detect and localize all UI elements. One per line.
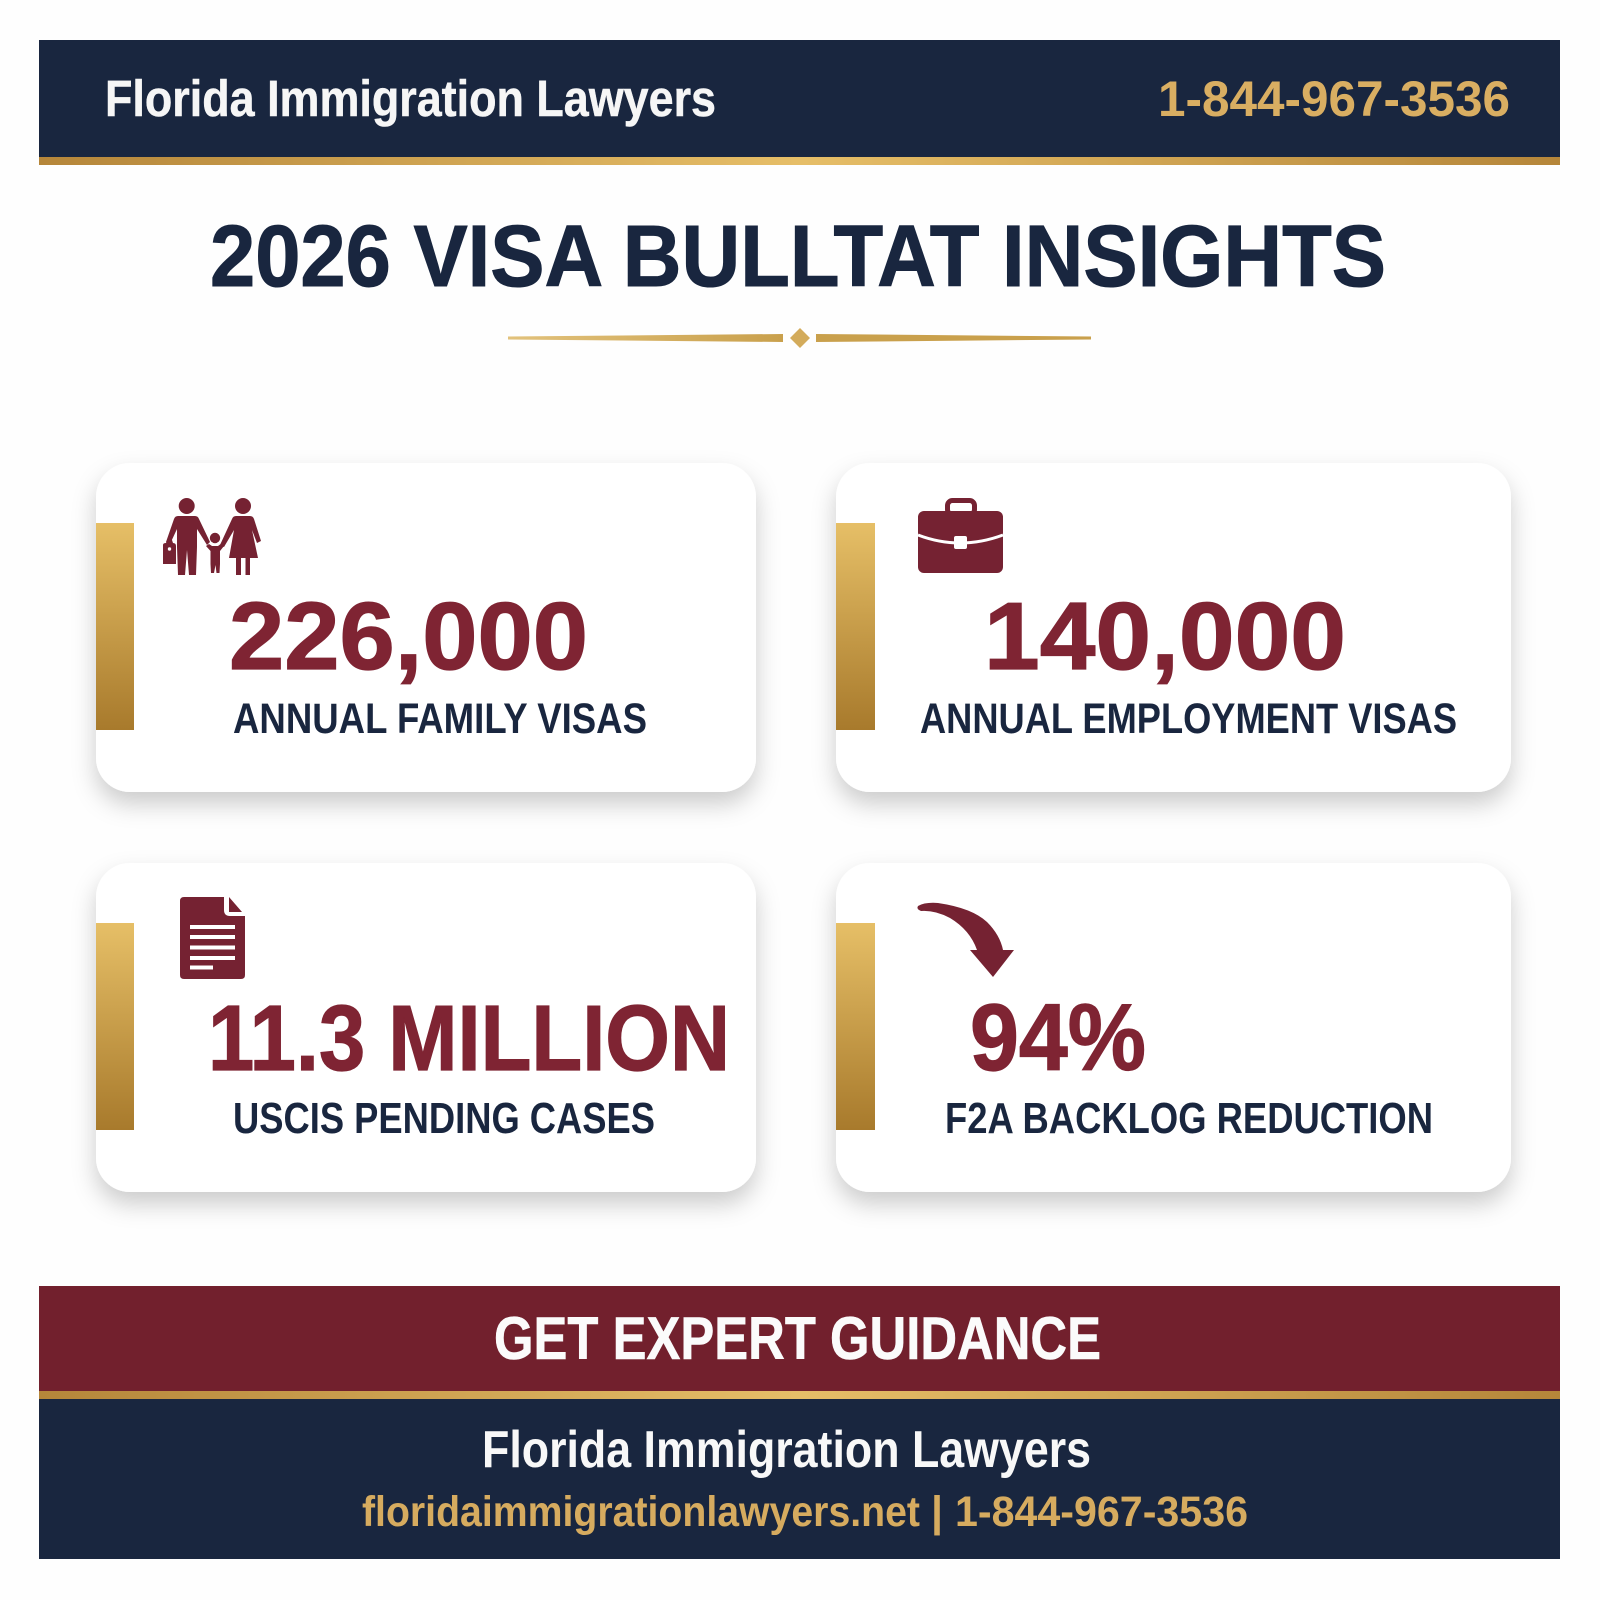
panel: f2a backlog reduction bbox=[836, 863, 1511, 1192]
footer gold rule bbox=[39, 1391, 1560, 1399]
stat value: 226,000 bbox=[229, 583, 588, 690]
gold accent bar bbox=[836, 523, 875, 730]
panel: annual employment visas bbox=[836, 463, 1511, 792]
gold accent bar bbox=[836, 923, 875, 1130]
icon: family bbox=[163, 498, 261, 575]
stat value: 94% bbox=[970, 985, 1146, 1091]
panel: annual family visas bbox=[96, 463, 756, 792]
title: 2026 VISA BULLTAT INSIGHTS bbox=[210, 208, 1386, 305]
cta text: GET EXPERT GUIDANCE bbox=[494, 1305, 1101, 1372]
footer website and phone: 1-844-967-3536 bbox=[955, 1488, 1248, 1536]
footer website and phone bbox=[362, 1488, 1248, 1536]
footer call to action band bbox=[39, 1286, 1560, 1391]
stat value: 11.3 MILLION bbox=[208, 986, 730, 1090]
header firm name: Florida Immigration Lawyers bbox=[105, 70, 716, 127]
stat label: USCIS PENDING CASES bbox=[233, 1094, 655, 1143]
stat label: F2A BACKLOG REDUCTION bbox=[945, 1094, 1433, 1143]
footer website and phone: floridaimmigrationlawyers.net bbox=[362, 1488, 920, 1536]
header phone number: 1-844-967-3536 bbox=[1158, 71, 1510, 127]
icon: document bbox=[180, 897, 245, 979]
gold accent bar bbox=[96, 523, 134, 730]
footer website and phone: | bbox=[931, 1488, 943, 1536]
panel: uscis pending cases bbox=[96, 863, 756, 1192]
footer firm name: Florida Immigration Lawyers bbox=[482, 1421, 1091, 1479]
footer contact band bbox=[39, 1399, 1560, 1559]
icon: briefcase bbox=[918, 500, 1003, 573]
header band bbox=[39, 40, 1560, 165]
stat label: ANNUAL EMPLOYMENT VISAS bbox=[920, 695, 1457, 743]
title divider bbox=[508, 328, 1091, 348]
gold accent bar bbox=[96, 923, 134, 1130]
icon: curved down arrow bbox=[917, 903, 1014, 977]
stat label: ANNUAL FAMILY VISAS bbox=[233, 695, 647, 743]
stat value: 140,000 bbox=[984, 583, 1346, 690]
